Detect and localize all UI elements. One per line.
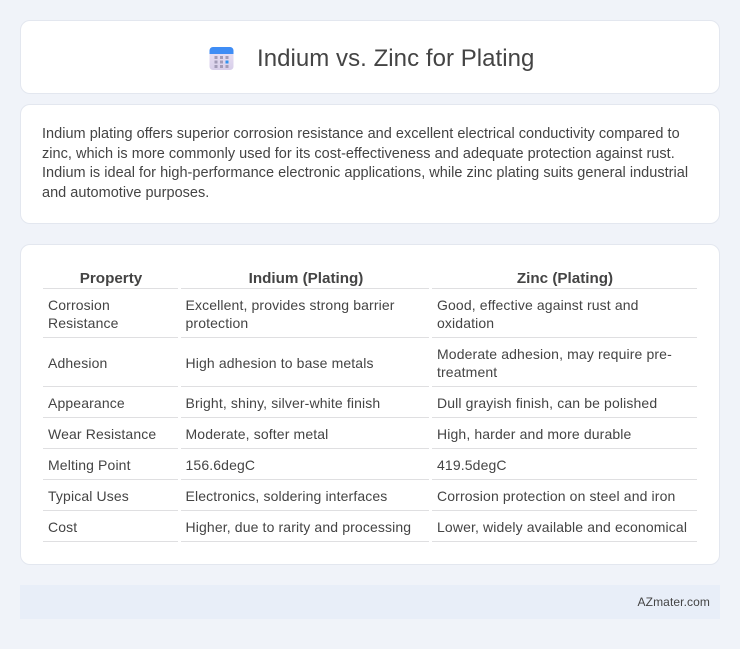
- row: typical uses: Typical Uses: [48, 488, 129, 504]
- row: corrosion resistance: Excellent, provides strong barrier: [186, 297, 395, 313]
- row: typical uses: Corrosion protection on steel and iron: [437, 488, 675, 504]
- row: corrosion resistance: [48, 297, 639, 331]
- summary text: Indium plating offers superior corrosion resistance and excellent electrical conductivity compared to: [42, 126, 680, 142]
- row: cost: Lower, widely available and economical: [437, 519, 687, 535]
- summary text: and automotive purposes.: [42, 185, 209, 201]
- row: adhesion: High adhesion to base metals: [186, 355, 374, 371]
- row: adhesion: treatment: [437, 364, 497, 380]
- row: corrosion resistance: protection: [186, 315, 248, 331]
- row: appearance: Bright, shiny, silver-white finish: [186, 395, 380, 411]
- row: appearance: Appearance: [48, 395, 125, 411]
- row: cost: [48, 519, 687, 535]
- summary text: zinc, which is more commonly used for its cost-effectiveness and adequate protection against rust.: [42, 146, 675, 162]
- row: typical uses: [48, 488, 675, 504]
- title: Indium vs. Zinc for Plating: [257, 45, 534, 72]
- row: adhesion: Moderate adhesion, may require pre-: [437, 346, 672, 362]
- summary text: Indium is ideal for high-performance electronic applications, while zinc plating suits general industrial: [42, 165, 688, 181]
- row: appearance: Dull grayish finish, can be polished: [437, 395, 657, 411]
- summary text: [42, 126, 688, 201]
- row: corrosion resistance: oxidation: [437, 315, 494, 331]
- row: wear resistance: [48, 426, 631, 442]
- row: corrosion resistance: Good, effective against rust and: [437, 297, 639, 313]
- table header: Zinc (Plating): [517, 270, 613, 286]
- row: melting point: Melting Point: [48, 457, 131, 473]
- footer credit: AZmater.com: [638, 595, 710, 609]
- row: melting point: [48, 457, 507, 473]
- panel: comparison table: [20, 244, 720, 565]
- table header: [80, 270, 613, 286]
- row: melting point: 419.5degC: [437, 457, 507, 473]
- panel: title card: [20, 20, 720, 94]
- row: cost: Higher, due to rarity and processing: [186, 519, 411, 535]
- row: wear resistance: High, harder and more durable: [437, 426, 631, 442]
- row: typical uses: Electronics, soldering interfaces: [186, 488, 387, 504]
- row: corrosion resistance: Resistance: [48, 315, 119, 331]
- row: wear resistance: Wear Resistance: [48, 426, 156, 442]
- icon: calendar: [210, 47, 234, 70]
- table header: Property: [80, 270, 142, 286]
- table header: Indium (Plating): [249, 270, 363, 286]
- row: adhesion: [48, 346, 672, 380]
- row: wear resistance: Moderate, softer metal: [186, 426, 328, 442]
- row: corrosion resistance: Corrosion: [48, 297, 110, 313]
- row: cost: Cost: [48, 519, 77, 535]
- panel: summary: [20, 104, 720, 224]
- row: adhesion: Adhesion: [48, 355, 107, 371]
- row: melting point: 156.6degC: [186, 457, 255, 473]
- footer bar: [20, 585, 720, 619]
- row: appearance: [48, 395, 657, 411]
